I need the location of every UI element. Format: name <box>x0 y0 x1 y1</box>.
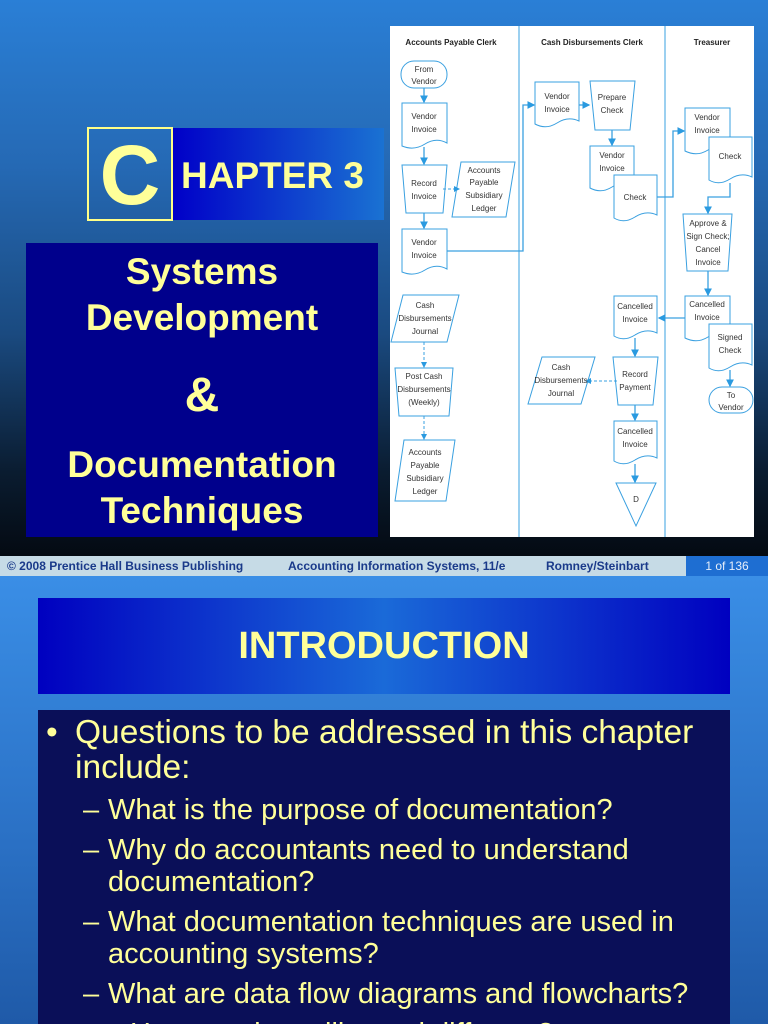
bullet text box: – <box>83 978 99 1010</box>
flowchart: From <box>415 65 434 74</box>
flowchart: Journal <box>412 327 438 336</box>
slide 2 background <box>0 576 768 1024</box>
footer bar: Accounting Information Systems, 11/e <box>288 559 505 573</box>
footer bar: Romney/Steinbart <box>546 559 649 573</box>
flowchart: Ledger <box>413 487 438 496</box>
flowchart: Cash Disbursements Clerk <box>541 38 643 47</box>
flowchart: To <box>727 391 736 400</box>
slide 1 background <box>0 0 768 556</box>
flowchart: Invoice <box>622 440 648 449</box>
flowchart: Payable <box>411 461 440 470</box>
flowchart: Vendor <box>411 238 437 247</box>
chapter banner <box>173 128 384 220</box>
flowchart: Disbursements <box>397 385 451 394</box>
intro heading <box>38 598 730 694</box>
intro heading: INTRODUCTION <box>238 625 530 667</box>
flowchart: Check <box>601 106 624 115</box>
flowchart: Invoice <box>694 313 720 322</box>
flowchart: Accounts <box>468 166 500 175</box>
flowchart: Ledger <box>472 204 497 213</box>
flowchart: Accounts Payable Clerk <box>405 38 497 47</box>
bullet text box: Why do accountants need to understand documentation? <box>108 834 629 898</box>
flowchart: Invoice <box>411 192 437 201</box>
flowchart: Check <box>624 193 647 202</box>
flowchart: Vendor <box>718 403 744 412</box>
title box: Systems <box>126 251 278 292</box>
flowchart: Invoice <box>411 125 437 134</box>
flowchart: Cancelled <box>617 427 653 436</box>
flowchart: Subsidiary <box>406 474 444 483</box>
page number <box>686 556 768 576</box>
bullet text box: What documentation techniques are used in accounting systems? <box>108 906 674 970</box>
flowchart: Approve & <box>689 219 727 228</box>
flowchart: Invoice <box>544 105 570 114</box>
flowchart: Check <box>719 152 742 161</box>
bullet text box <box>38 710 730 1024</box>
flowchart: Cancelled <box>689 300 725 309</box>
bullet text box: What is the purpose of documentation? <box>108 794 613 826</box>
bullet text box: What are data flow diagrams and flowcharts? <box>108 978 688 1010</box>
flowchart: Invoice <box>599 164 625 173</box>
bullet text box: Questions to be addressed in this chapter include: <box>75 714 693 786</box>
flowchart: Record <box>411 179 437 188</box>
footer bar: © 2008 Prentice Hall Business Publishing <box>7 559 243 573</box>
flowchart: Invoice <box>694 126 720 135</box>
flowchart: Vendor <box>411 112 437 121</box>
title box: Development <box>86 297 318 338</box>
flowchart: Journal <box>548 389 574 398</box>
bullet text box: – <box>83 906 99 938</box>
flowchart: Check <box>719 346 742 355</box>
flowchart: Post Cash <box>406 372 442 381</box>
flowchart: Accounts <box>409 448 441 457</box>
flowchart: Disbursements <box>534 376 588 385</box>
bullet text box: – <box>83 834 99 866</box>
flowchart: Payment <box>619 383 652 392</box>
flowchart: Cash <box>416 301 434 310</box>
title box: Documentation <box>67 444 337 485</box>
flowchart <box>390 26 754 537</box>
flowchart: Prepare <box>598 93 627 102</box>
footer bar <box>0 556 768 576</box>
flowchart: Disbursements <box>398 314 452 323</box>
bullet text box: • <box>46 714 58 751</box>
flowchart: D <box>633 495 639 504</box>
flowchart: Cash <box>552 363 570 372</box>
flowchart: Invoice <box>411 251 437 260</box>
flowchart: Cancelled <box>617 302 653 311</box>
flowchart: Vendor <box>411 77 437 86</box>
title box: & <box>185 369 219 422</box>
chapter letter box: C <box>100 128 160 222</box>
chapter letter box <box>87 127 173 221</box>
page number: 1 of 136 <box>705 559 749 573</box>
flowchart: Invoice <box>622 315 648 324</box>
flowchart: Sign Check; <box>686 232 730 241</box>
flowchart: Vendor <box>599 151 625 160</box>
bullet text box: – <box>83 794 99 826</box>
flowchart: Subsidiary <box>465 191 503 200</box>
flowchart: Record <box>622 370 648 379</box>
title box <box>26 243 378 537</box>
flowchart: Vendor <box>694 113 720 122</box>
flowchart: Vendor <box>544 92 570 101</box>
title box: Techniques <box>101 490 303 531</box>
chapter banner: HAPTER 3 <box>181 155 364 196</box>
flowchart: (Weekly) <box>408 398 440 407</box>
flowchart: Cancel <box>696 245 721 254</box>
flowchart: Payable <box>470 178 499 187</box>
flowchart: Treasurer <box>694 38 730 47</box>
flowchart: Signed <box>718 333 742 342</box>
flowchart: Invoice <box>695 258 721 267</box>
